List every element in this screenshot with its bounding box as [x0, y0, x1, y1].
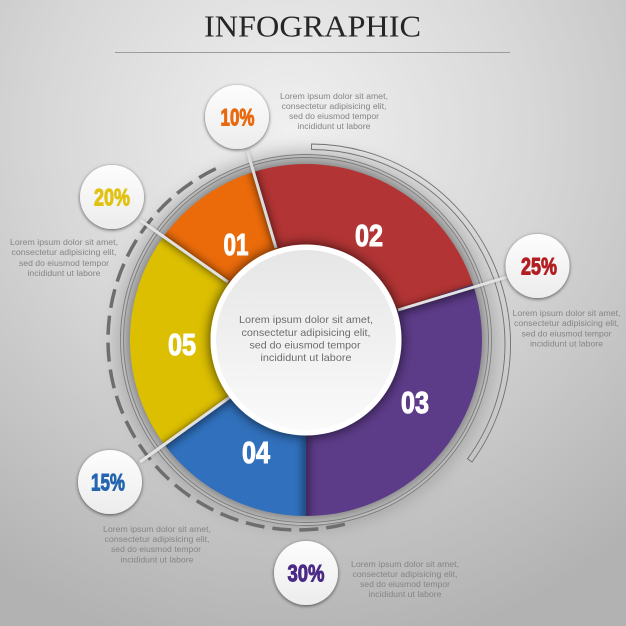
text block 10%: sed do eiusmod tempor: [289, 111, 379, 121]
bubble 25%: 25%: [521, 254, 557, 280]
text block 15%: Lorem ipsum dolor sit amet,: [103, 524, 211, 534]
center text: Lorem ipsum dolor sit amet,: [239, 314, 373, 326]
bubble 30%: 30%: [288, 560, 324, 588]
text block 25%: Lorem ipsum dolor sit amet,: [512, 308, 620, 318]
center text: incididunt ut labore: [260, 352, 352, 364]
text block 30%: Lorem ipsum dolor sit amet,: [351, 559, 459, 569]
center circle: [210, 244, 402, 436]
text block 20%: [10, 237, 118, 278]
sector 05: [130, 236, 230, 446]
text block 10%: Lorem ipsum dolor sit amet,: [280, 91, 388, 101]
sector divider shadows: [159, 170, 476, 516]
dashed arc left: [108, 169, 347, 530]
text block 30%: consectetur adipisicing elit,: [352, 569, 458, 579]
center text: [239, 314, 373, 364]
sector numbers: [168, 218, 429, 470]
text block 25%: sed do eiusmod tempor: [522, 328, 612, 338]
arc bracket right: [312, 144, 511, 462]
number 03: 03: [401, 385, 429, 420]
bubble 15%: [78, 450, 142, 514]
bubble 20%: [80, 165, 144, 229]
text block 15%: incididunt ut labore: [120, 554, 194, 564]
center text: sed do eiusmod tempor: [250, 340, 361, 352]
connector 15%: [140, 397, 230, 462]
text block 20%: incididunt ut labore: [28, 268, 101, 278]
title rule: [115, 52, 510, 53]
connector 10%: [247, 150, 276, 248]
outer rings: [120, 154, 492, 526]
bubble 10%: [205, 85, 269, 149]
bubble 25%: [506, 234, 570, 298]
bubble 30%: [274, 541, 338, 605]
sector 03: [306, 284, 482, 516]
text block 10%: [280, 91, 388, 131]
number 02: 02: [355, 218, 383, 253]
text block 20%: Lorem ipsum dolor sit amet,: [10, 237, 118, 247]
center text: consectetur adipisicing elit,: [242, 327, 370, 339]
number 01: 01: [224, 227, 248, 262]
sector 01: [164, 172, 278, 284]
number 04: 04: [242, 435, 271, 470]
text block 30%: incididunt ut labore: [368, 589, 442, 599]
sector 04: [165, 397, 306, 516]
text block 15%: consectetur adipisicing elit,: [104, 534, 210, 544]
pie chart: [130, 164, 482, 516]
text block 20%: sed do eiusmod tempor: [19, 258, 109, 268]
text block 15%: [103, 524, 211, 564]
connector 20%: [140, 220, 228, 282]
number 05: 05: [168, 327, 196, 362]
text block 25%: consectetur adipisicing elit,: [514, 318, 619, 328]
bubble 15%: 15%: [91, 470, 125, 496]
title: INFOGRAPHIC: [204, 8, 421, 44]
text block 25%: incididunt ut labore: [530, 338, 603, 348]
text block 30%: sed do eiusmod tempor: [360, 579, 450, 589]
sector 02: [254, 164, 473, 310]
text block 30%: [351, 559, 459, 599]
connector 25%: [398, 277, 507, 310]
text block 10%: incididunt ut labore: [298, 121, 371, 131]
text block 10%: consectetur adipisicing elit,: [282, 101, 386, 111]
text block 20%: consectetur adipisicing elit,: [12, 247, 117, 257]
connector 30%: [304, 435, 308, 545]
bubble 20%: 20%: [94, 184, 130, 212]
text block 15%: sed do eiusmod tempor: [111, 544, 201, 554]
ring halo: [116, 150, 496, 530]
bubble 10%: 10%: [220, 104, 254, 132]
text block 25%: [512, 308, 620, 348]
